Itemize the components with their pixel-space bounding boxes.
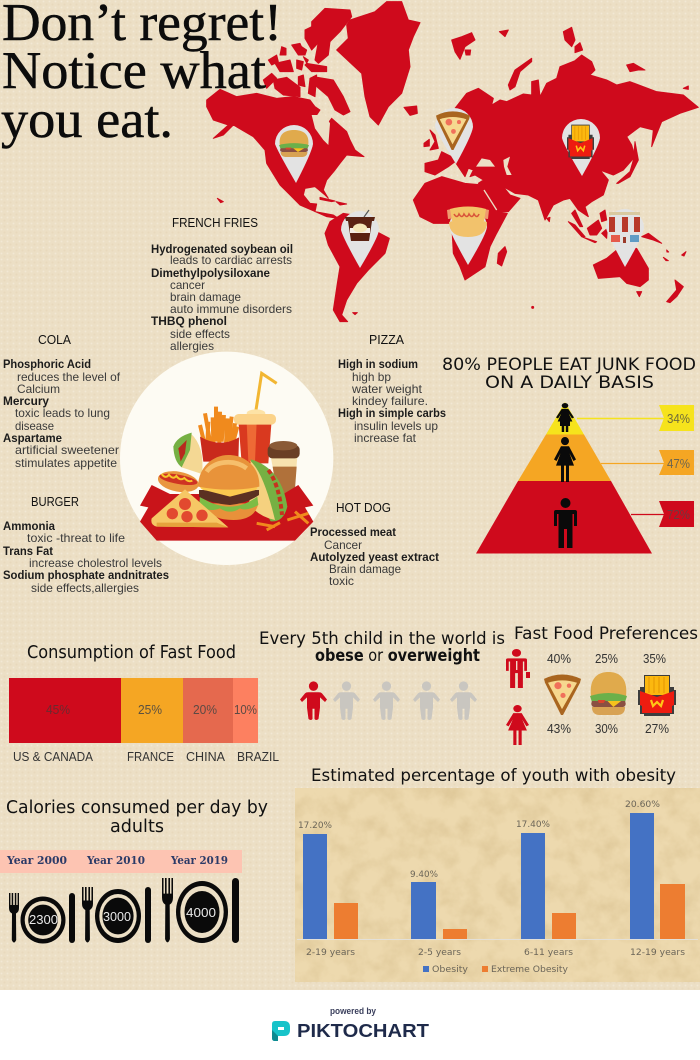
chart textured background <box>295 788 700 982</box>
tag: 34%: 34% <box>667 411 690 426</box>
white circle <box>120 352 333 565</box>
group: 2-19 years: 17.20% <box>298 821 332 831</box>
segment: Brazil: BRAZIL <box>237 750 279 764</box>
group: 2-5 years: 2-5 years <box>418 948 462 958</box>
legend: Obesity <box>432 965 468 975</box>
text block: burger: Sodium phosphate andnitrates <box>3 568 169 582</box>
heading: consumption of fast food: Consumption of Fast Food <box>27 642 236 663</box>
icon: child with bag <box>556 403 574 432</box>
segment: US and Canada: 45% <box>46 702 70 717</box>
pyramid tier: men <box>476 481 652 554</box>
tag: 47%: 47% <box>667 456 690 471</box>
heading: every 5th child <box>259 629 505 665</box>
text block: hot dog: Cancer <box>324 538 362 552</box>
text block: french fries: THBQ phenol <box>151 314 227 328</box>
heading: calories: Calories consumed per day by <box>6 797 268 818</box>
group: 2-5 years <box>410 870 467 958</box>
plate: 3000 calories <box>82 887 151 943</box>
map pin: popcorn <box>606 209 644 267</box>
icon: burger <box>590 672 627 715</box>
icon: pizza <box>544 674 581 715</box>
text block: pizza: high bp <box>352 370 391 384</box>
text block: cola: toxic leads to lung <box>15 406 110 420</box>
hot dog <box>156 468 200 495</box>
segment: China <box>183 678 233 764</box>
tag: 72% <box>659 501 694 527</box>
icon: woman <box>554 437 576 482</box>
footer <box>0 990 700 1060</box>
legend: Extreme Obesity <box>491 965 568 975</box>
percentages: 43% <box>547 721 571 736</box>
coffee cup <box>268 441 300 504</box>
taco <box>248 459 287 521</box>
tag: 47% <box>659 450 694 475</box>
text block: burger: side effects,allergies <box>31 581 139 595</box>
text block: burger: BURGER <box>31 495 79 509</box>
text block: hot dog: HOT DOG <box>336 501 391 515</box>
map pin: hot dog <box>447 206 489 265</box>
title: you eat. <box>1 91 173 149</box>
text block: pizza: PIZZA <box>369 333 405 347</box>
text block: burger: toxic -threat to life <box>27 531 125 545</box>
text block: french fries: Dimethylpolysiloxane <box>151 266 270 280</box>
text block: pizza: High in sodium <box>338 357 418 371</box>
central fast food illustration <box>120 352 333 565</box>
text block: cola: Aspartame <box>3 431 62 445</box>
pyramid chart <box>476 402 694 554</box>
pizza slice <box>151 489 228 527</box>
group: 6-11 years: 6-11 years <box>524 948 574 958</box>
text block: french fries: FRENCH FRIES <box>172 216 258 230</box>
plate: 4000 calories: 4000 <box>186 906 216 920</box>
icon: man with briefcase <box>506 649 530 688</box>
heading: junk food <box>442 355 696 392</box>
plate: 4000 calories <box>162 878 239 943</box>
text block: cola: reduces the level of <box>17 370 121 384</box>
text block: french fries <box>151 216 293 353</box>
map pin: pizza <box>435 108 473 164</box>
text block: burger: Ammonia <box>3 519 55 533</box>
group: 12-19 years: 12-19 years <box>630 948 686 958</box>
text block: pizza: increase fat <box>354 431 417 445</box>
map: Eurasia, Africa and Oceania <box>413 27 698 308</box>
text block: pizza: High in simple carbs <box>338 406 446 420</box>
segment: France: FRANCE <box>127 750 174 764</box>
heading: fast food preferences: Fast Food Preferences <box>514 624 698 644</box>
connector lines <box>577 418 664 420</box>
percentages <box>547 651 669 736</box>
plate: 2300 calories: 2300 <box>29 913 58 927</box>
year band <box>0 850 242 873</box>
text block: burger: increase cholestrol levels <box>29 556 162 570</box>
segment: US and Canada: US & CANADA <box>13 750 94 764</box>
percentages: 35% <box>643 651 666 666</box>
text block: hot dog: Processed meat <box>310 525 396 539</box>
segment: China: CHINA <box>186 750 226 764</box>
text block: cola <box>3 333 121 470</box>
percentages: 30% <box>595 721 618 736</box>
segment: US and Canada <box>9 678 121 764</box>
burger <box>198 455 259 520</box>
text block: french fries: leads to cardiac arrests <box>170 253 292 267</box>
plate: 3000 calories: 3000 <box>103 910 131 924</box>
fries box <box>200 407 239 462</box>
heading: every 5th child: Every 5th child in the world is <box>259 629 505 648</box>
world map <box>207 2 698 322</box>
piktochart wordmark: PIKTOCHART <box>297 1021 429 1041</box>
powered by: powered by <box>330 1006 376 1016</box>
map pin: cola <box>341 210 379 268</box>
segment: France: 25% <box>138 702 162 717</box>
text block: french fries: brain damage <box>170 290 241 304</box>
legend <box>423 965 568 975</box>
loose fries <box>257 512 308 530</box>
text block: hot dog: Brain damage <box>329 562 401 576</box>
stacked bar chart <box>9 678 279 764</box>
straw and drink cup <box>234 373 277 463</box>
text block: french fries: auto immune disorders <box>170 302 292 316</box>
text block: hot dog: toxic <box>329 574 354 588</box>
map: Americas and Greenland <box>207 2 420 322</box>
text block: burger: Trans Fat <box>3 544 53 558</box>
text block: cola: COLA <box>38 333 72 347</box>
text block: french fries: cancer <box>170 278 205 292</box>
text block: pizza: insulin levels up <box>354 419 438 433</box>
text block: cola: disease <box>15 419 54 433</box>
text block: french fries: allergies <box>170 339 214 353</box>
segment: France <box>121 678 183 764</box>
group: 6-11 years: 17.40% <box>516 820 550 830</box>
heading: calories: adults <box>110 816 164 837</box>
text block: burger <box>3 495 169 595</box>
text block: cola: Phosphoric Acid <box>3 357 91 371</box>
text block: cola: Mercury <box>3 394 49 408</box>
text block: cola: artificial sweetener <box>15 443 119 457</box>
group: 6-11 years <box>516 820 576 958</box>
text block: hot dog <box>310 501 439 588</box>
segment: Brazil <box>233 678 279 764</box>
tray <box>140 485 313 541</box>
text block: cola: Calcium <box>17 382 60 396</box>
text block: pizza <box>338 333 446 445</box>
percentages: 40% <box>547 651 571 666</box>
icon: man <box>554 498 577 548</box>
preferences chart <box>506 649 676 745</box>
plate: 2300 calories <box>9 893 75 944</box>
text block: pizza: water weight <box>351 382 423 396</box>
group: 2-5 years: 9.40% <box>410 870 438 880</box>
bar chart: youth obesity <box>295 788 700 982</box>
heading: youth obesity: Estimated percentage of youth with obesity <box>311 766 676 786</box>
title: Notice what <box>2 42 266 100</box>
pyramid tier: children <box>546 402 584 434</box>
heading: junk food: ON A DAILY BASIS <box>485 373 654 392</box>
pyramid tier: women <box>518 434 611 481</box>
text block: hot dog: Autolyzed yeast extract <box>310 550 439 564</box>
text block: cola: stimulates appetite <box>15 456 117 470</box>
percentages: 27% <box>645 721 669 736</box>
icon: fries <box>638 675 676 716</box>
group: 2-19 years <box>298 821 358 958</box>
text block: french fries: side effects <box>170 327 230 341</box>
map pin: french fries <box>562 119 600 176</box>
map pin: burger <box>275 125 313 183</box>
segment: Brazil: 10% <box>234 702 257 717</box>
text block: french fries: Hydrogenated soybean oil <box>151 242 293 256</box>
icon: piktochart logo <box>272 1021 290 1041</box>
heading: calories <box>6 797 268 837</box>
tag: 34% <box>659 405 694 431</box>
tag: 72%: 72% <box>667 507 690 522</box>
heading: junk food: 80% PEOPLE EAT JUNK FOOD <box>442 355 696 374</box>
icon: woman <box>506 705 529 745</box>
title <box>1 0 282 149</box>
pictogram: one in five children <box>300 681 477 720</box>
segment: China: 20% <box>193 702 217 717</box>
group: 2-19 years: 2-19 years <box>306 948 356 958</box>
wrap <box>173 433 203 474</box>
year band: Year 2000 <box>6 854 67 867</box>
heading: every 5th child: obese or overweight <box>315 646 480 665</box>
group: 12-19 years <box>625 800 686 958</box>
text block: pizza: kindey failure. <box>352 394 428 408</box>
year band: Year 2010 <box>86 854 145 867</box>
group: 12-19 years: 20.60% <box>625 800 660 810</box>
percentages: 25% <box>595 651 618 666</box>
year band: Year 2019 <box>170 854 228 867</box>
